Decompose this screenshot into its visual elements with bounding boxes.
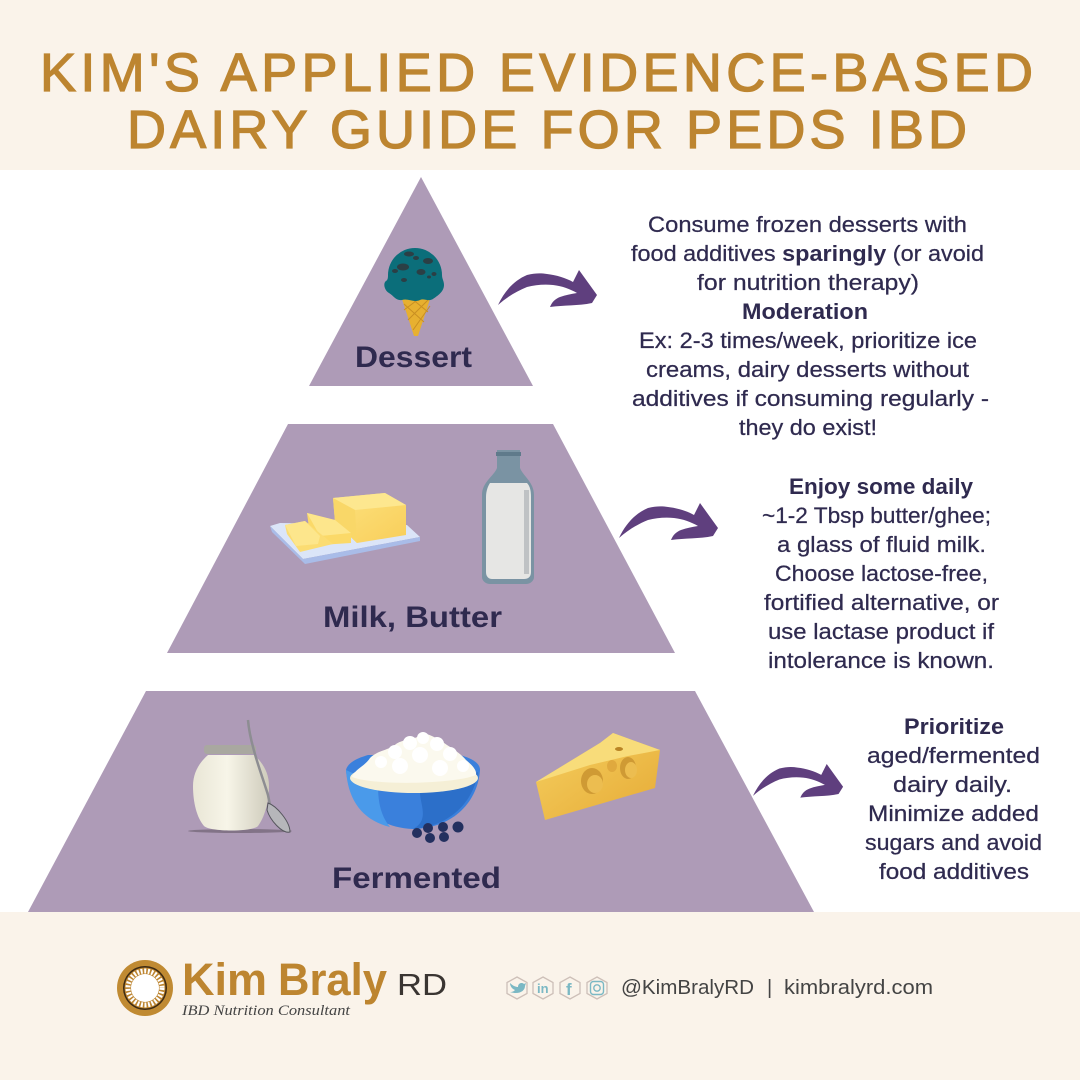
text block: dessert advice: additives if consuming regularly -: [632, 386, 989, 411]
text block: fermented advice: sugars and avoid: [865, 830, 1042, 855]
header band: [0, 0, 1080, 170]
panel: fermented tier: [28, 691, 814, 912]
label: Milk, Butter: Milk, Butter: [323, 601, 502, 634]
title: DAIRY GUIDE FOR PEDS IBD: [127, 100, 967, 160]
arrow: milk and butter: [619, 503, 718, 540]
text block: milk and butter advice: ~1-2 Tbsp butter/ghee;: [762, 503, 991, 528]
text block: milk and butter advice: a glass of fluid milk.: [777, 532, 986, 557]
text block: dessert advice: Moderation: [742, 299, 868, 324]
text block: fermented advice: [865, 714, 1042, 884]
text block: milk and butter advice: fortified alternative, or: [764, 590, 999, 615]
arrow: fermented: [753, 764, 843, 798]
footer band: [0, 912, 1080, 1080]
label: Dessert: Dessert: [355, 341, 472, 374]
logo wordmark: RD: [397, 967, 447, 1002]
text block: fermented advice: Prioritize: [904, 714, 1004, 739]
text block: dessert advice: Ex: 2-3 times/week, prioritize ice: [639, 328, 977, 353]
icon: logo sunburst: [117, 960, 173, 1016]
text block: milk and butter advice: [762, 474, 999, 673]
text block: dessert advice: for nutrition therapy): [697, 270, 919, 295]
logo wordmark: Braly: [278, 954, 387, 1005]
text block: milk and butter advice: intolerance is known.: [768, 648, 994, 673]
icon: butter dish: [270, 493, 420, 564]
label: Fermented: Fermented: [332, 862, 501, 895]
text block: dessert advice: they do exist!: [739, 415, 877, 440]
text block: fermented advice: Minimize added: [868, 801, 1039, 826]
title: KIM'S APPLIED EVIDENCE-BASED: [40, 43, 1033, 103]
logo wordmark: Kim: [182, 954, 267, 1005]
text block: dessert advice: Consume frozen desserts with: [648, 212, 967, 237]
logo wordmark: IBD Nutrition Consultant: [181, 1003, 351, 1019]
icons: social media: f: [566, 980, 572, 999]
panel: dessert tier: [309, 177, 533, 386]
text block: fermented advice: dairy daily.: [893, 772, 1012, 797]
logo wordmark: [181, 954, 447, 1019]
text block: milk and butter advice: Enjoy some daily: [789, 474, 974, 499]
text block: fermented advice: aged/fermented: [867, 743, 1040, 768]
icons: social media: [507, 977, 607, 999]
icon: yogurt jar with spoon: [188, 720, 292, 833]
arrow: dessert: [498, 270, 597, 307]
text block: dessert advice: [631, 212, 989, 440]
title: [40, 43, 1033, 160]
text block: fermented advice: food additives: [879, 859, 1029, 884]
social handle and website: [621, 977, 933, 999]
text block: milk and butter advice: Choose lactose-free,: [775, 561, 988, 586]
icon: bowl of cottage cheese with blueberries: [346, 732, 480, 843]
text block: dessert advice: creams, dairy desserts without: [646, 357, 969, 382]
social handle and website: kimbralyrd.com: [784, 977, 933, 999]
social handle and website: @KimBralyRD: [621, 977, 754, 999]
icon: ice cream cone: [384, 248, 444, 336]
text block: milk and butter advice: use lactase product if: [768, 619, 995, 644]
icon: wedge of cheese: [536, 733, 660, 820]
social handle and website: |: [767, 977, 772, 999]
icons: social media: in: [537, 981, 549, 996]
text block: dessert advice: food additives sparingly (or avoid: [631, 241, 984, 266]
panel: milk and butter tier: [167, 424, 675, 653]
icon: milk bottle: [482, 450, 534, 584]
